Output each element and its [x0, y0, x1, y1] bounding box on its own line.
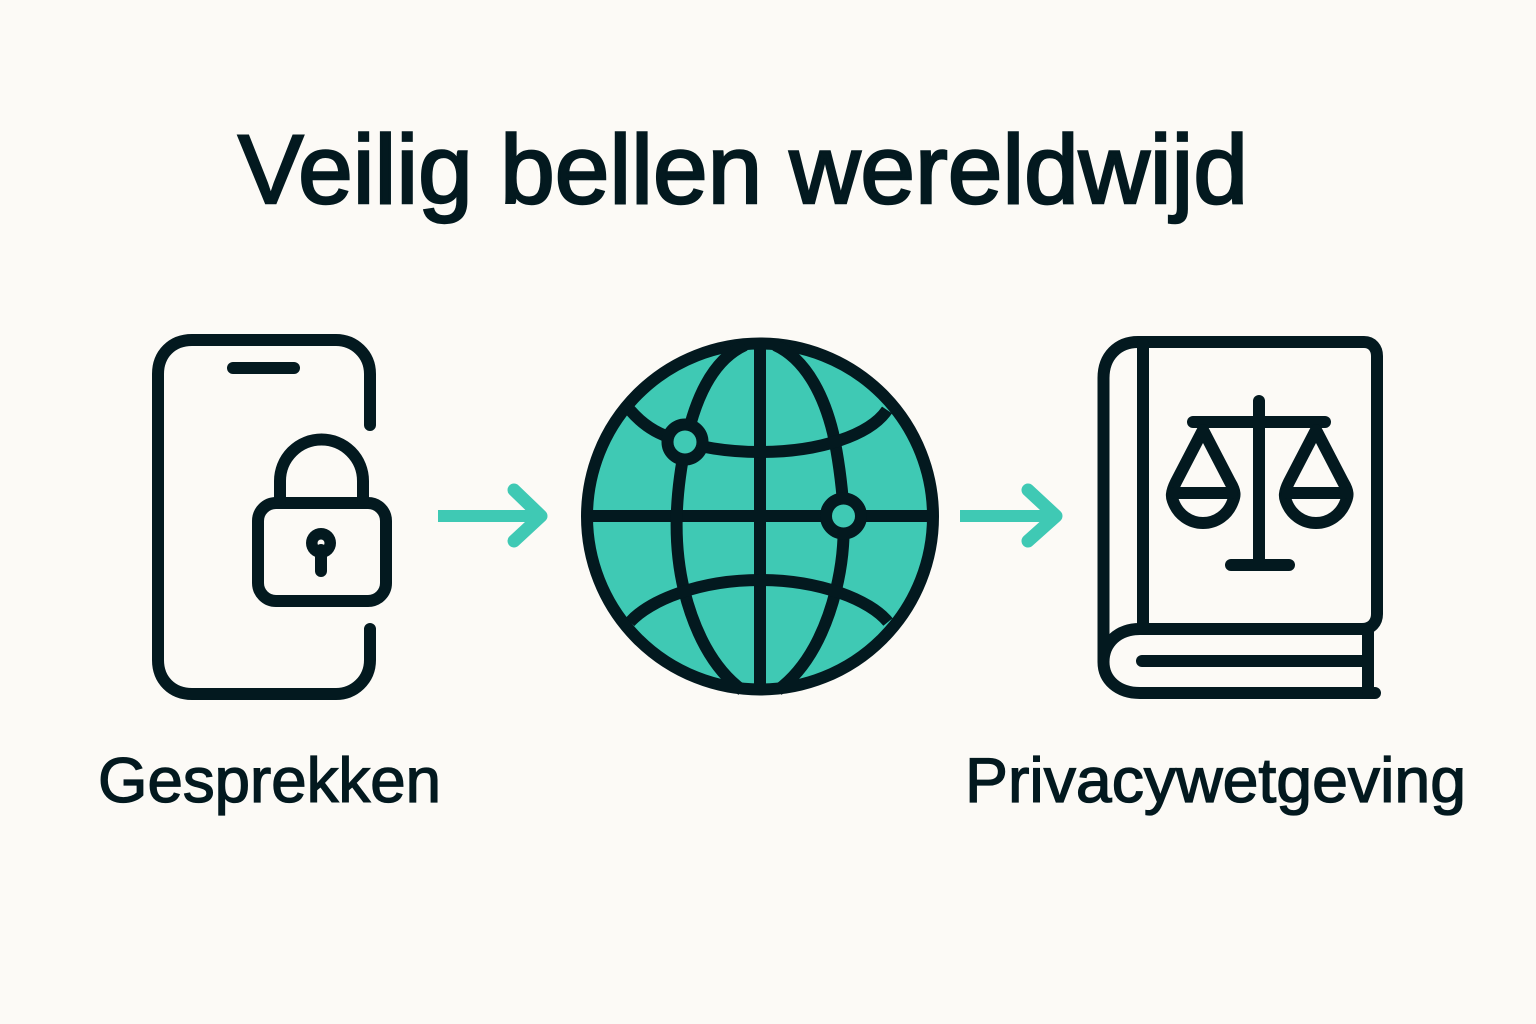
icon: phone with padlock: [158, 340, 386, 694]
node: right: [826, 498, 861, 534]
label: Privacywetgeving: Privacywetgeving: [965, 746, 1466, 816]
icon: law book with scales: [1104, 342, 1377, 693]
arrow: globe to book: [960, 490, 1056, 541]
icon: scales of justice: [1172, 401, 1348, 565]
title: Veilig bellen wereldwijd: [238, 115, 1248, 224]
icon: padlock: [258, 440, 386, 601]
label: Gesprekken: Gesprekken: [98, 746, 441, 816]
icon: globe: [587, 343, 933, 690]
node: left: [668, 424, 702, 460]
arrow: phone to globe: [438, 490, 541, 541]
